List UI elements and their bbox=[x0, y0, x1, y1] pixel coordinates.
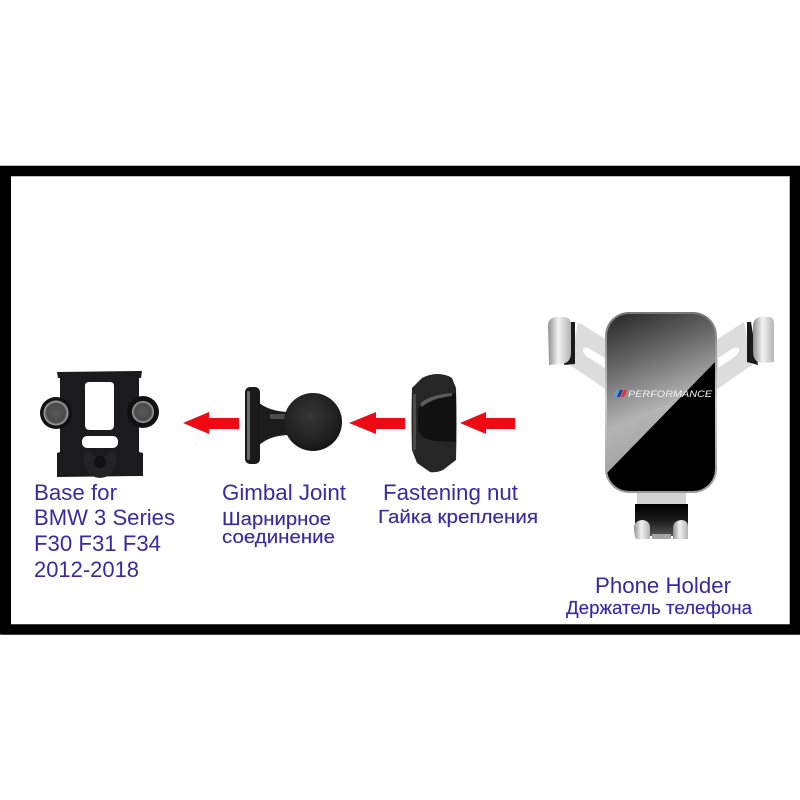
label: base: 2012-2018 bbox=[34, 557, 139, 582]
black frame bbox=[6, 171, 795, 630]
label: phone holder: Держатель телефона bbox=[566, 598, 753, 618]
logo stripes bbox=[613, 390, 619, 397]
phone body bbox=[605, 312, 717, 493]
label: base: F30 F31 F34 bbox=[34, 531, 161, 556]
label: fastening nut bbox=[378, 480, 538, 527]
arrow: nut to phone holder bbox=[460, 412, 515, 434]
label: base: Base for bbox=[34, 480, 117, 505]
label: gimbal joint: соединение bbox=[222, 526, 335, 547]
arrow: base to gimbal bbox=[183, 412, 239, 434]
label: gimbal joint: Gimbal Joint bbox=[222, 480, 346, 505]
label: phone holder: Phone Holder bbox=[595, 573, 731, 598]
label: gimbal joint: Шарнирное bbox=[222, 508, 331, 529]
label: base: BMW 3 Series bbox=[34, 505, 175, 530]
bottom foot bbox=[637, 492, 686, 504]
label: base bbox=[34, 480, 175, 582]
icon: gimbal joint bbox=[245, 387, 342, 464]
label: fastening nut: Fastening nut bbox=[383, 480, 518, 505]
label: fastening nut: Гайка крепления bbox=[378, 506, 538, 527]
logo text: PERFORMANCE bbox=[628, 389, 713, 399]
arrow: gimbal to nut bbox=[349, 412, 405, 434]
icon: fastening nut bbox=[412, 374, 456, 472]
left arm bbox=[570, 322, 607, 390]
icon: base bracket bbox=[40, 371, 159, 478]
icon: phone holder bbox=[548, 312, 774, 539]
right arm bbox=[716, 322, 752, 390]
label: gimbal joint bbox=[222, 480, 346, 547]
label: phone holder bbox=[566, 573, 753, 618]
